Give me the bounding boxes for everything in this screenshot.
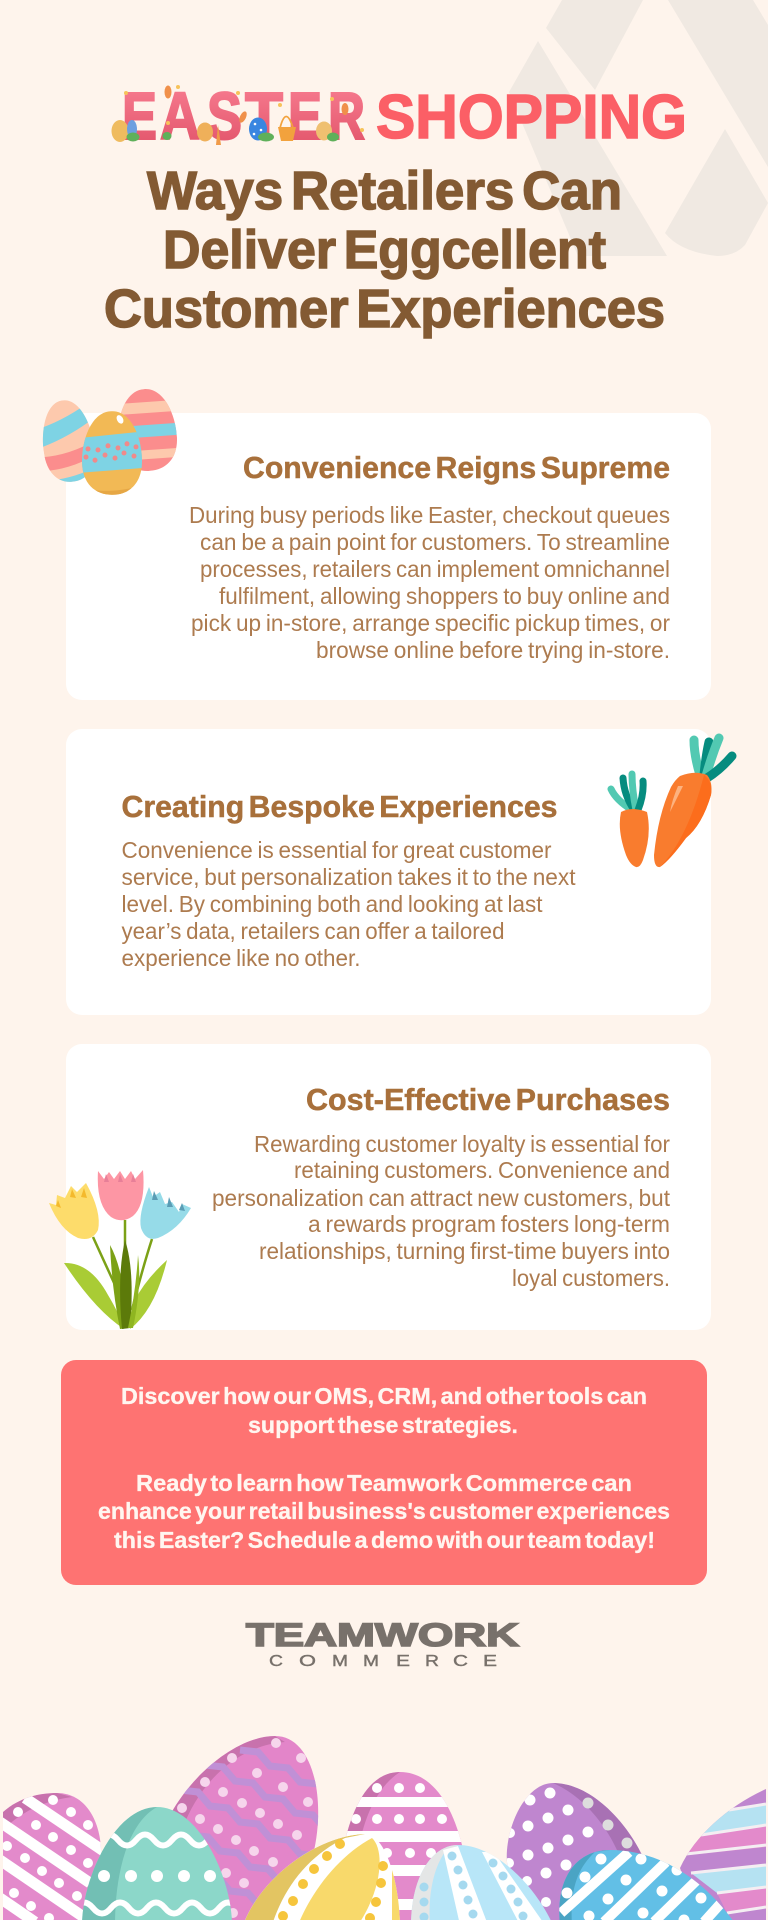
text: cost-effective body: a rewards program fosters long-term [308,1211,670,1237]
subtitle: Customer Experiences [104,279,665,339]
egg: striped right [680,1789,766,1920]
text: cost-effective body: Rewarding customer loyalty is essential for [254,1131,670,1157]
callout: call to action: Discover how our OMS, CRM, and other tools can [121,1383,647,1409]
title: Easter: E [288,79,322,154]
subtitle: Deliver Eggcellent [163,220,606,280]
text: bespoke body [122,837,576,971]
panel: convenience [66,413,711,700]
text: cost-effective body [212,1131,671,1291]
title: Easter: T [245,79,283,154]
logo: Teamwork Commerce: E [396,1653,410,1670]
callout: call to action: this Easter? Schedule a demo with our team today! [114,1527,655,1553]
text: convenience body: browse online before trying in-store. [316,637,670,663]
egg: teal waves [82,1807,232,1920]
text: convenience body [189,502,670,663]
panel: cost-effective purchases [66,1044,711,1330]
egg: light blue [411,1845,550,1920]
text: cost-effective body: relationships, turning first-time buyers into [259,1238,670,1264]
title: Easter: S [207,79,242,154]
text: bespoke body: level. By combining both and looking at last [122,891,543,917]
logo: Teamwork Commerce: M [363,1653,379,1670]
text: convenience body: fulfilment, allowing shoppers to buy online and [219,583,670,609]
decorative eggs row [0,1730,768,1920]
callout: call to action [61,1360,707,1585]
logo: Teamwork Commerce: TEAMWORK [246,1617,519,1653]
subtitle [104,161,665,339]
text: convenience body: During busy periods like Easter, checkout queues [189,502,670,528]
title: Shopping: SHOPPING [376,83,687,152]
title: Easter: R [328,79,365,154]
text: convenience body: can be a pain point for customers. To streamline [200,529,670,555]
logo: Teamwork Commerce: C [269,1653,283,1670]
title decorations: eggs, grass, basket and sparkles [112,85,364,145]
logo: Teamwork Commerce: O [299,1653,316,1670]
callout: call to action: support these strategies. [248,1412,518,1438]
title: Easter: A [160,79,200,154]
callout: call to action: enhance your retail business's customer experiences [98,1498,670,1524]
text: bespoke body: experience like no other. [122,945,360,971]
text: cost-effective body: personalization can attract new customers, but [212,1185,671,1211]
icon: three easter eggs [42,389,177,495]
text: convenience body: pick up in-store, arrange specific pickup times, or [191,610,670,636]
logo: Teamwork Commerce: E [483,1653,497,1670]
text: convenience body: processes, retailers can implement omnichannel [200,556,670,582]
heading: bespoke: Creating Bespoke Experiences [122,789,558,824]
logo: Teamwork Commerce: M [332,1653,348,1670]
heading: convenience: Convenience Reigns Supreme [243,450,670,485]
title: Easter: E [122,79,157,154]
subtitle: Ways Retailers Can [147,161,622,221]
text: cost-effective body: loyal customers. [512,1265,670,1291]
text: bespoke body: year’s data, retailers can offer a tailored [122,918,504,944]
logo: Teamwork Commerce [246,1617,519,1670]
logo: Teamwork Commerce: R [425,1653,439,1670]
text: bespoke body: service, but personalization takes it to the next [122,864,576,890]
callout: call to action: Ready to learn how Teamwork Commerce can [136,1470,632,1496]
egg: yellow [245,1834,400,1920]
watermark logo shapes [509,0,768,256]
egg: pink horizontal stripes [346,1772,462,1920]
icon: carrots [611,738,732,867]
egg: purple polka dots [506,1783,642,1920]
egg: blue stripes [559,1850,732,1920]
logo: Teamwork Commerce: C [453,1653,468,1670]
icon: tulips [49,1170,191,1329]
text: bespoke body: Convenience is essential for great customer [122,837,552,863]
panel: bespoke experiences [66,729,711,1015]
heading: cost-effective: Cost-Effective Purchases [306,1082,670,1117]
text: cost-effective body: retaining customers. Convenience and [294,1157,670,1183]
egg: pink zigzag [172,1736,318,1920]
title: Easter [112,79,365,154]
egg: pink stripes left [0,1790,105,1920]
